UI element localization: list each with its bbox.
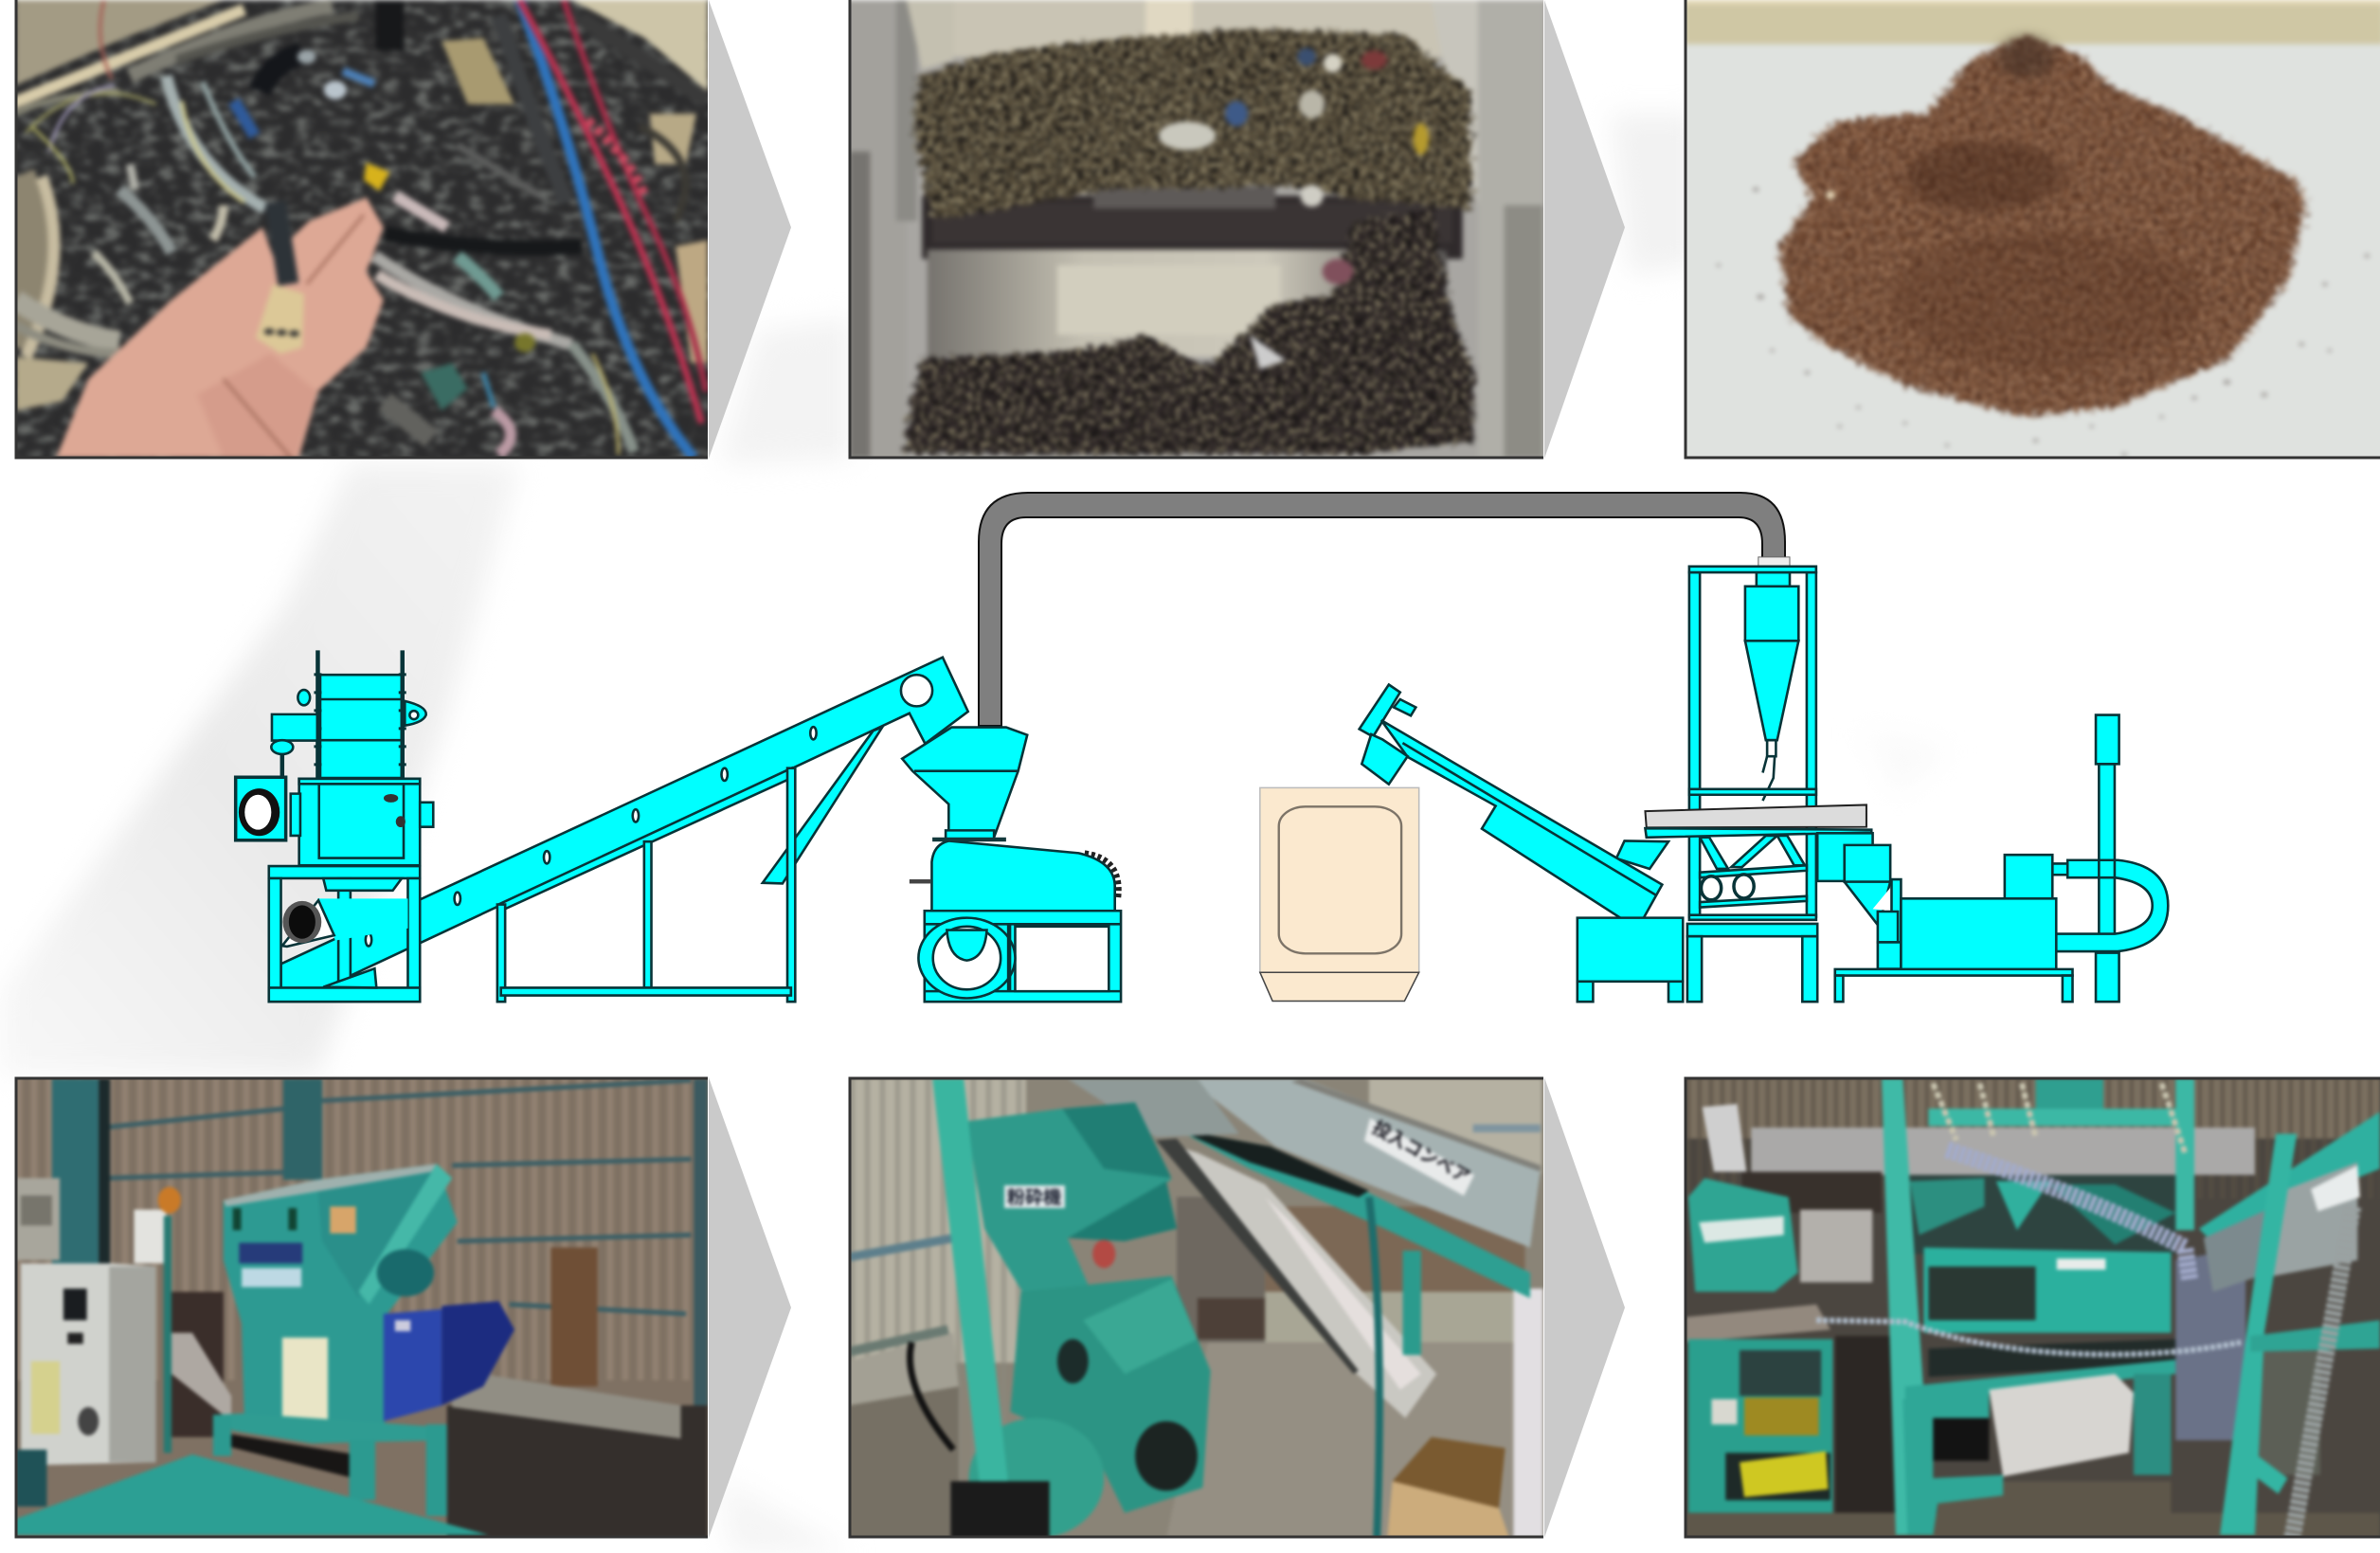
diagram: shredder, conveyor and hammer mill bbox=[236, 650, 1121, 1002]
blower unit bbox=[1817, 715, 2168, 1002]
diagram: bag, screw conveyor, cyclone, sieve and blower bbox=[1260, 557, 2168, 1002]
arrow: shredded to powder bbox=[1544, 0, 1625, 459]
photo: copper powder pile bbox=[1649, 0, 2380, 474]
conveyor label: 投入コンベア bbox=[1369, 1117, 1473, 1188]
mill label: 粉砕機 bbox=[1007, 1187, 1061, 1208]
shredder hopper and body bbox=[236, 650, 433, 865]
conveyor support frame bbox=[497, 768, 795, 1002]
hammer mill bbox=[902, 728, 1121, 1002]
arrow: mill to separator bbox=[1544, 1077, 1625, 1538]
inclined conveyor bbox=[281, 658, 968, 988]
vibrating sieve bbox=[1645, 804, 1871, 1002]
discharge box bbox=[1578, 918, 1683, 1002]
photo: scrap wire harness in hand bbox=[0, 0, 728, 474]
photo: separator machine bbox=[1649, 1071, 2380, 1544]
photo: shredded wires in shredder bbox=[834, 0, 1561, 474]
shredder stand bbox=[269, 866, 420, 1002]
duct pipe between machines bbox=[979, 493, 1785, 726]
photo: shredder machine in factory bbox=[0, 1071, 728, 1544]
cyclone tower bbox=[1689, 557, 1816, 917]
arrow: wires to shredded bbox=[709, 0, 791, 459]
photo: hammer mill and conveyor bbox=[834, 1071, 1561, 1544]
arrow: shredder to mill bbox=[709, 1077, 791, 1538]
background swooshes bbox=[0, 114, 1952, 1553]
screw conveyor bbox=[1360, 685, 1668, 918]
collection bag bbox=[1260, 787, 1419, 1001]
